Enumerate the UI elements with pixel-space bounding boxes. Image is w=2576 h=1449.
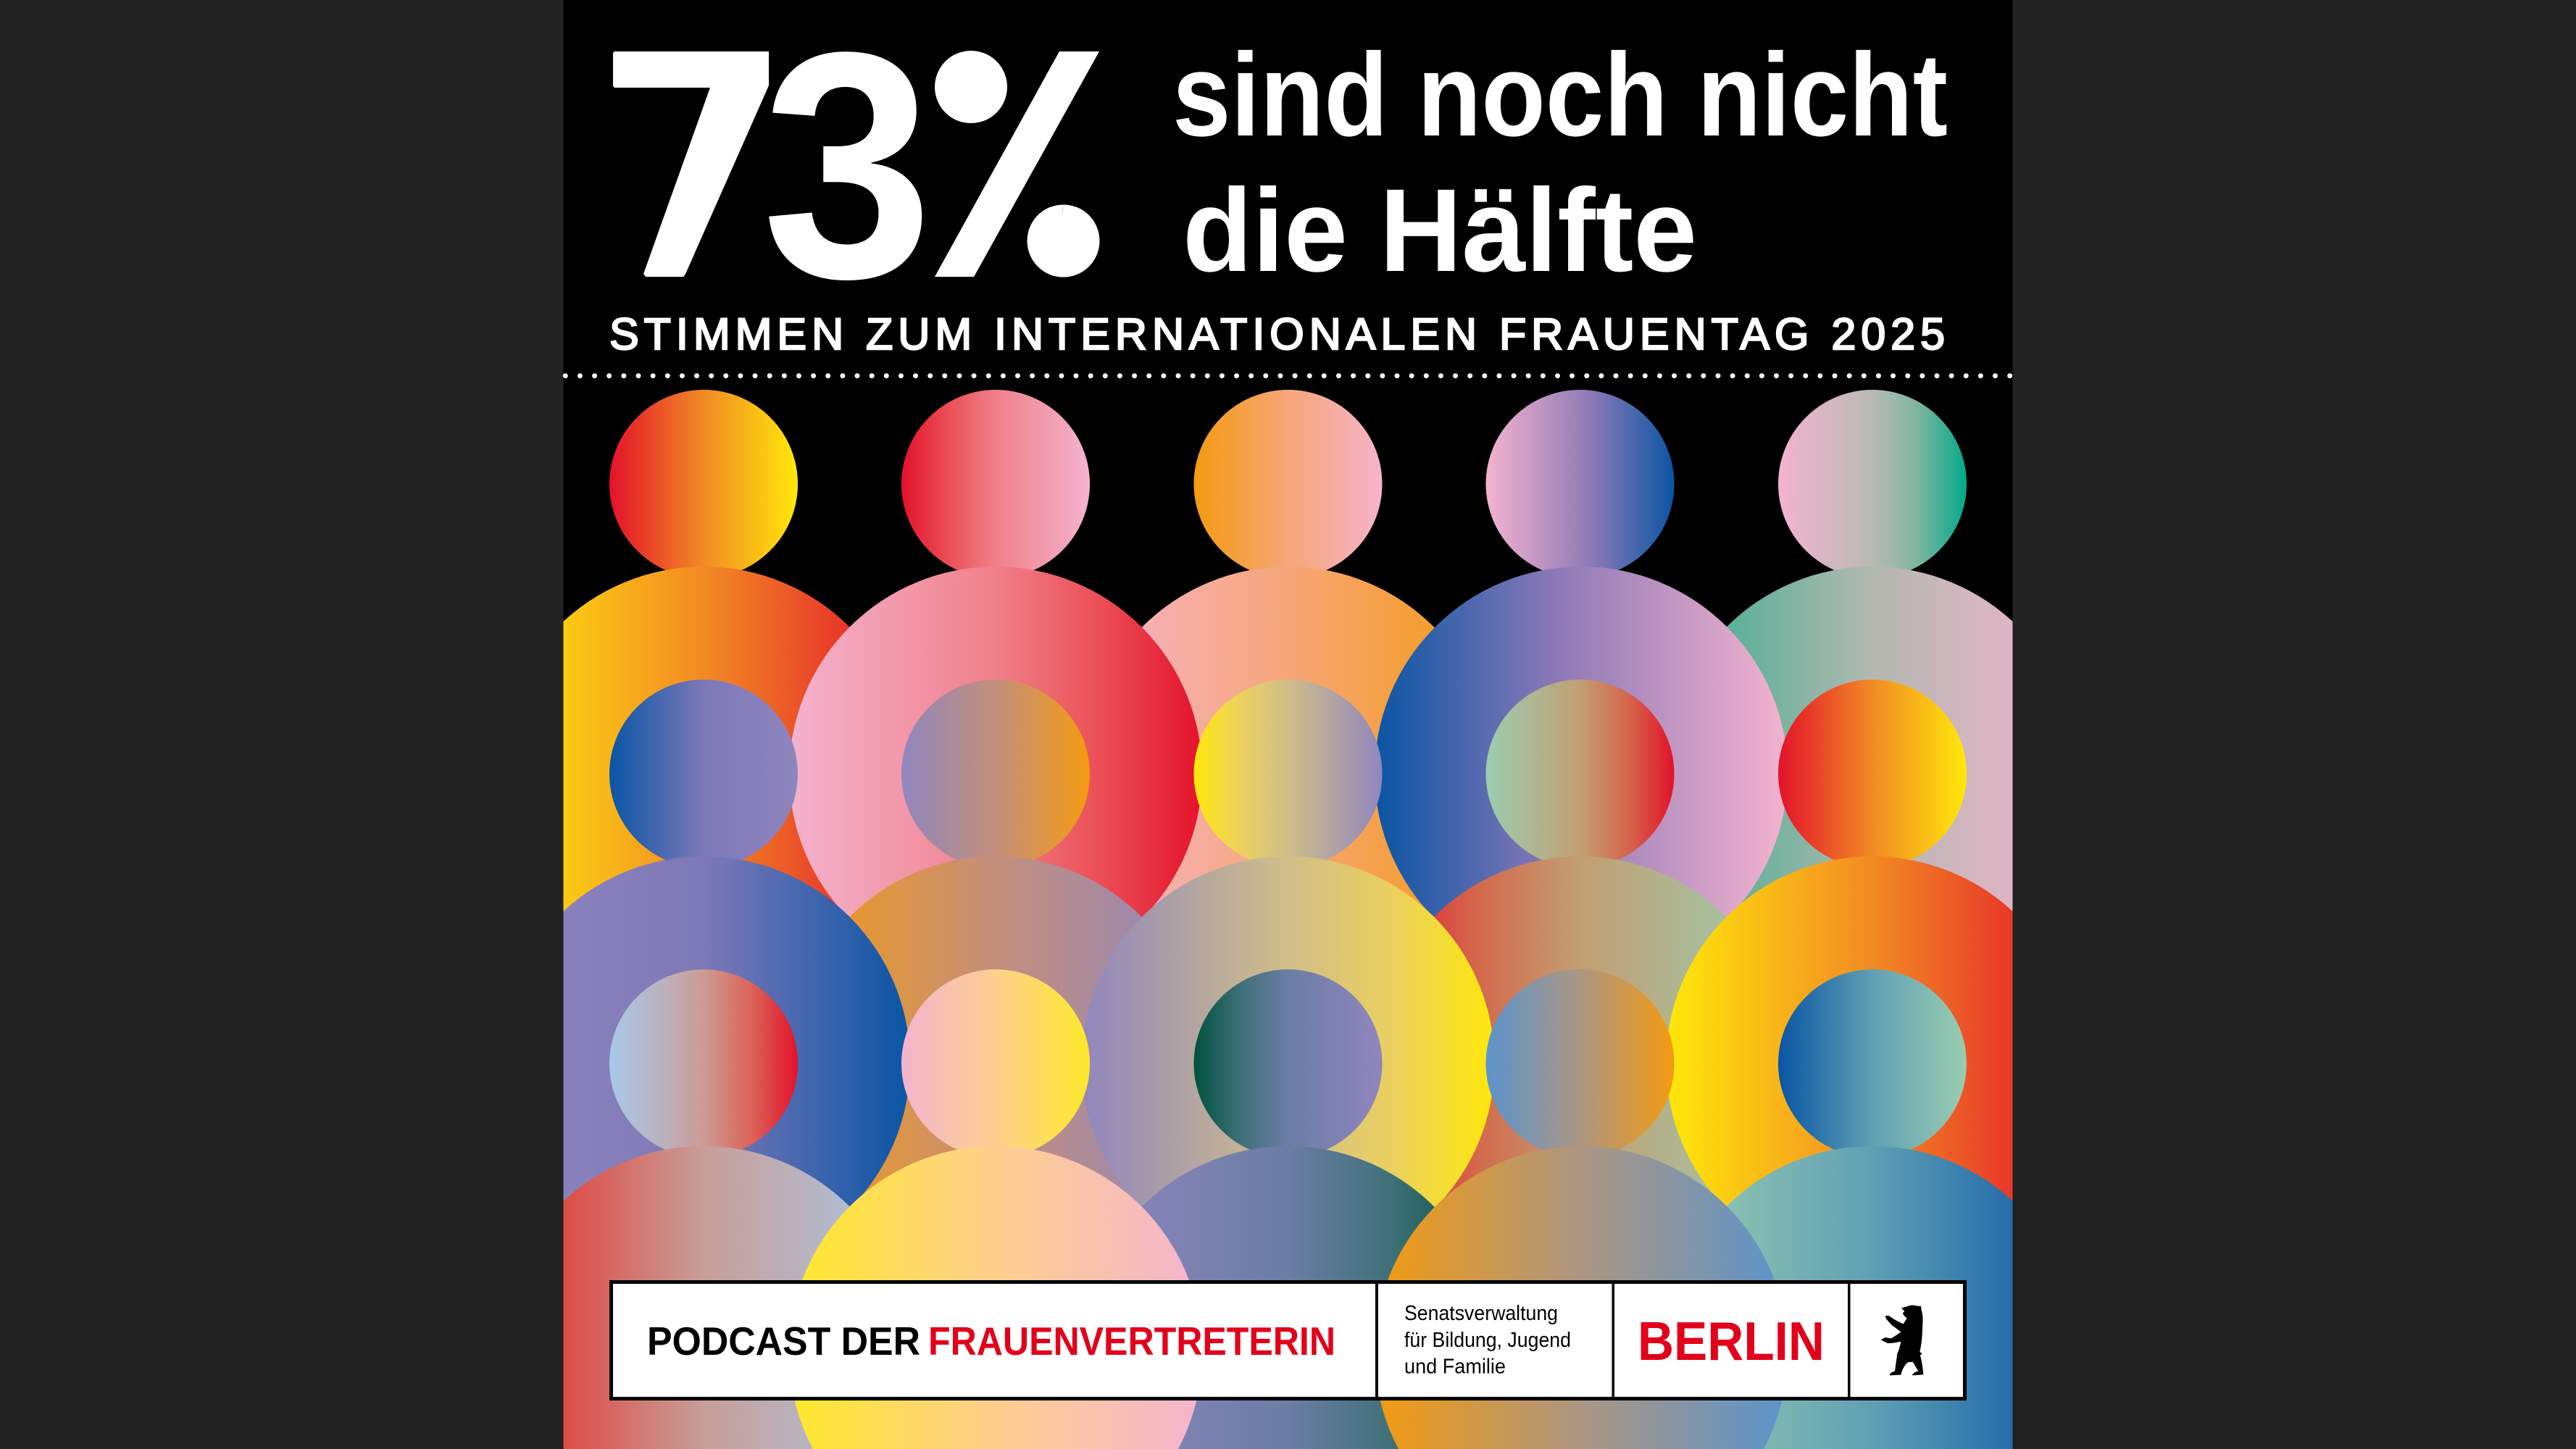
row 2 body 1: [497, 856, 910, 1269]
icon: Berlin bear: [1881, 1305, 1923, 1375]
row 3 body 4: [1375, 1146, 1788, 1449]
row 2 head 4: [1485, 680, 1674, 868]
row 2 head 5: [1778, 680, 1967, 868]
square poster panel: [564, 0, 2013, 1449]
row 1 head 1: [609, 390, 798, 578]
row 3 head 3: [1194, 969, 1383, 1158]
footer banner: [612, 1282, 1965, 1398]
row 3 body 1: [497, 1146, 910, 1449]
row 3 head 5: [1778, 969, 1967, 1158]
row 2 head 1: [609, 680, 798, 868]
row 2 body 3: [1081, 856, 1494, 1269]
row 3 head 2: [901, 969, 1090, 1158]
podcast label black part: PODCAST DER: [647, 1319, 920, 1364]
banner box: [612, 1282, 1965, 1398]
row 1 body 5: [1727, 567, 2013, 911]
headline: [1172, 28, 1948, 296]
row 3 head 4: [1485, 969, 1674, 1158]
row 1 body 4: [1377, 567, 1785, 917]
digit 7: 7: [613, 0, 769, 344]
headline line 2: die Hälfte: [1183, 164, 1697, 296]
row 3 body 2: [789, 1146, 1202, 1449]
percent sign: %: [935, 0, 1099, 344]
big statistic 73%: [613, 0, 1099, 346]
podcast label red part: FRAUENVERTRETERIN: [928, 1319, 1335, 1364]
row 3 head 1: [609, 969, 798, 1158]
row 1 body 2: [791, 567, 1200, 917]
row 2 head 2: [901, 680, 1090, 868]
department line 2: für Bildung, Jugend: [1404, 1329, 1571, 1352]
podcast label: [647, 1319, 1335, 1364]
row 1 body 1: [564, 567, 849, 911]
department line 3: und Familie: [1404, 1355, 1506, 1378]
row 1 head 5: [1778, 390, 1967, 578]
row 2 body 5: [1666, 856, 2079, 1269]
row 3 body 3: [1081, 1146, 1494, 1449]
row 2 head 3: [1194, 680, 1383, 868]
department name: [1404, 1302, 1571, 1378]
Berlin wordmark: BERLIN: [1638, 1311, 1825, 1371]
row 2 body 4: [1374, 856, 1787, 1269]
row 1 head 3: [1194, 390, 1383, 578]
row 1 head 2: [901, 390, 1090, 578]
row 1 body 3: [1142, 567, 1435, 910]
illustration: crowd of gradient people: [497, 390, 2079, 1449]
subtitle: STIMMEN ZUM INTERNATIONALEN FRAUENTAG 2025: [609, 309, 1945, 359]
infographic page: [562, 0, 2013, 1449]
row 1 head 4: [1485, 390, 1674, 578]
headline line 1: sind noch nicht: [1172, 28, 1948, 161]
department line 1: Senatsverwaltung: [1404, 1302, 1558, 1325]
row 2 body 2: [849, 856, 1142, 1197]
row 3 body 5: [1666, 1146, 2079, 1449]
